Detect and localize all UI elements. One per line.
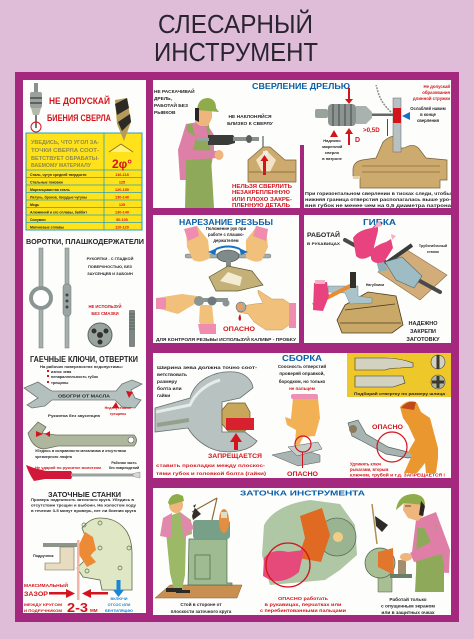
note: handles: ПОВЕРХНОСТЬЮ, БЕЗ	[88, 264, 133, 269]
note: handles	[87, 256, 134, 276]
label: pipe bender: Трубогибочный	[419, 244, 447, 248]
note: do not rock the drill	[154, 87, 195, 116]
warning: no mittens	[260, 595, 346, 613]
note: adjustable spanner check: чрезмерного люфта	[35, 455, 73, 459]
note: grinder check: в течение 3-5 минут проверь, нет ли биения круга	[31, 509, 137, 513]
note: working part: Рабочая часть	[111, 461, 137, 465]
icon: screwdriver	[26, 465, 140, 481]
note: stand aside: плоскости заточного круга	[171, 609, 232, 614]
warning: do not strike: Не ударяй по рукоятке молотком	[35, 466, 101, 470]
note: spanner defects: трещины	[51, 381, 68, 385]
note: spanner defects: На рабочих поверхностях недопустимы:	[40, 365, 123, 369]
note: do not lean: БЛИЗКО К СВЕРЛУ	[227, 121, 274, 127]
warning: secure the part	[232, 184, 292, 209]
note: adjustable spanner check: Убедись в исправности механизма и отсутствии	[35, 449, 127, 453]
note: jaw width: Ширина зева должна точно соот-	[157, 365, 257, 371]
illustration: bending in vice	[313, 272, 403, 333]
warning: no extensions: рычагами, вторым	[350, 467, 388, 472]
note: horizontal drilling: вня губок не менее чем на 0,5 диаметра патрона	[305, 203, 452, 208]
illustration: large spanner with nut	[155, 372, 257, 452]
warning: long chips	[413, 84, 450, 101]
icon: adjustable spanner	[28, 422, 136, 449]
note: do not rock the drill: РАБОТАЙ БЕЗ	[154, 101, 188, 109]
warning: secure the part: ИЛИ ПЛОХО ЗАКРЕ-	[232, 197, 292, 203]
note: jaw width	[157, 365, 257, 399]
note: jaw width: гайки	[157, 392, 170, 399]
icon: tap wrench	[63, 248, 71, 348]
heading: grinders: ЗАТОЧНЫЕ СТАНКИ	[48, 490, 121, 499]
note: horizontal drilling: нижняя граница отверстия располагалась выше уро-	[305, 197, 452, 202]
note: spanner defects	[40, 365, 123, 385]
illustration: grinder and mittened hands	[262, 500, 357, 587]
note: fix the bit: в патроне	[322, 156, 343, 161]
drill angle table: ВЕТСТВУЕТ ОБРАБАТЫ-	[31, 156, 99, 162]
note: alignment	[278, 363, 326, 391]
illustration: hands with threaded part	[156, 294, 230, 334]
note: secure the workpiece: ЗАКРЕПИ	[410, 329, 436, 335]
warning: long chips: образования	[422, 90, 450, 95]
title: СЛЕСАРНЫЙ	[158, 9, 313, 39]
drill angle table: 120-150	[115, 188, 129, 192]
callout: maximum gap: ЗАЗОР	[24, 591, 49, 598]
panel: assembly	[153, 353, 451, 478]
warning: no drill runout	[47, 95, 111, 124]
drill angle table: Сталь, чугун средней твердости	[30, 173, 86, 177]
box: screwdriver selection: Подбирай отвертку по размеру шлица	[354, 391, 446, 396]
drill angle table: 130-140	[115, 210, 129, 214]
warning: no extensions	[350, 462, 445, 478]
box: screwdriver selection	[347, 353, 451, 397]
note: jaw width: ветствовать	[157, 373, 187, 378]
note: work in mittens: В РУКАВИЦАХ	[307, 242, 341, 246]
note: grinder check	[31, 498, 137, 513]
note: gauge check: ДЛЯ КОНТРОЛЯ РЕЗЬБЫ ИСПОЛЬЗУЙ КАЛИБР - ПРОБКУ	[156, 337, 296, 342]
illustration: worker drilling	[178, 98, 264, 208]
label: jaw plates: Нагубники	[366, 283, 384, 287]
label: 0.5D clearance: >0,5D	[363, 127, 380, 134]
note: switch on ventilation	[105, 597, 133, 613]
note: work in mittens: РАБОТАЙ	[307, 231, 340, 239]
panel: tool sharpening	[153, 488, 451, 616]
drill angle table: Алюминий и его сплавы, баббит	[30, 210, 87, 214]
illustration: chuck and bit	[315, 88, 396, 145]
callout: maximum gap: И ПОДРУЧНИКОМ	[24, 608, 63, 613]
warning: no drill runout: БИЕНИЯ СВЕРЛА	[47, 113, 111, 124]
icon: die stock	[31, 248, 51, 348]
note: hand position	[206, 226, 247, 243]
drill angle table: Марганцовистая сталь	[30, 188, 70, 192]
icon: twist drill	[115, 98, 131, 141]
heading: drilling: СВЕРЛЕНИЕ ДРЕЛЬЮ	[252, 82, 350, 91]
panel: threading	[153, 215, 299, 343]
drill angle table: УВЕДИСЬ, ЧТО УГОЛ ЗА-	[31, 140, 99, 146]
warning: long chips: Не допускай	[424, 84, 450, 89]
warning: cracks: Недопустимые	[105, 406, 131, 410]
note: horizontal drilling	[305, 191, 452, 208]
illustration: lever on spanner	[348, 401, 438, 473]
note: alignment: бородком, но только	[279, 378, 326, 384]
callout: maximum gap	[24, 581, 108, 615]
note: switch on ventilation: ВЕНТИЛЯЦИЮ	[105, 609, 133, 613]
illustration: hand and aligned plates	[272, 394, 322, 468]
note: fix the bit: закрепляй	[322, 144, 343, 149]
warning: no drill runout: НЕ ДОПУСКАЙ	[49, 95, 110, 107]
drill angle table: 125	[119, 203, 125, 207]
icon: die and tap	[88, 310, 135, 347]
warning: no spacers	[156, 463, 267, 476]
panel: hand drilling	[153, 80, 452, 209]
heading: threading: НАРЕЗАНИЕ РЕЗЬБЫ	[179, 218, 273, 227]
drill angle table: 130-140	[115, 196, 129, 200]
note: do not rock the drill: НЕ РАСКАЧИВАЙ	[154, 87, 195, 95]
note: stand aside: Стой в стороне от	[180, 601, 222, 607]
callout: maximum gap: МЕЖДУ КРУГОМ	[24, 602, 63, 607]
note: working part: без повреждений	[109, 466, 139, 470]
note: do not lean: НЕ НАКЛОНЯЙСЯ	[228, 112, 272, 120]
warning: no mittens: ОПАСНО работать	[278, 595, 328, 601]
warning: danger: ОПАСНО	[223, 326, 255, 333]
note: ease pressure: Ослабляй нажим	[410, 106, 446, 111]
note: hand position: держателем	[213, 238, 239, 243]
note: handles: ЗАУСЕНЦЕВ И ЗАБОИН	[87, 271, 133, 276]
illustration: bench vice	[248, 147, 296, 182]
heading: bending: ГИБКА	[363, 218, 396, 227]
note: hand position: работе с плашко-	[208, 232, 245, 237]
label: pipe bender: станок	[427, 250, 439, 254]
warning: long chips: длинной стружки	[413, 96, 450, 101]
drill angle table: Силумин	[30, 218, 46, 222]
heading: tap wrenches: ВОРОТКИ, ПЛАШКОДЕРЖАТЕЛИ	[26, 239, 144, 246]
note: alignment: проверяй оправкой,	[279, 370, 325, 376]
warning: secure the part: НЕЗАКРЕПЛЕННУЮ	[232, 190, 290, 196]
note: do not rock the drill: ДРЕЛЬ,	[154, 96, 173, 102]
drill angle table: 90-100	[116, 218, 128, 222]
note: secure the workpiece: НАДЕЖНО	[409, 321, 438, 327]
warning: cracks	[105, 406, 131, 416]
note: ease pressure: сверления	[417, 118, 440, 123]
label: tool rest: Подручник	[33, 554, 54, 558]
note: adjustable spanner check	[35, 449, 127, 459]
drill angle table: Латунь, бронза, твердые чугуны	[30, 196, 87, 200]
title	[154, 9, 318, 67]
warning: no extensions: ключом, трубой и т.д. ЗАПРЕЩАЕТСЯ !	[350, 472, 445, 478]
warning: secure the part: ПЛЕННУЮ ДЕТАЛЬ	[232, 203, 290, 209]
illustration: hands on die stock	[184, 226, 271, 291]
heading: assembly: СБОРКА	[282, 354, 322, 363]
note: alignment: не пальцем	[289, 386, 316, 391]
drill angle table: Стальные поковки	[30, 180, 63, 184]
heading: spanners and screwdrivers: ГАЕЧНЫЕ КЛЮЧИ, ОТВЕРТКИ	[30, 355, 138, 364]
drill angle table: 125	[119, 180, 125, 184]
warning: no spacers: ставить прокладки между плоскос-	[156, 463, 266, 468]
diagram: grinding wheel with guard	[43, 518, 132, 600]
note: working part	[109, 461, 139, 470]
warning: danger: ОПАСНО	[287, 471, 318, 478]
warning: no spacers: тями губок и головкой болта (гайки)	[156, 470, 267, 476]
warning: lubricate	[88, 304, 122, 316]
title: ИНСТРУМЕНТ	[154, 37, 318, 67]
panel: bending	[304, 215, 451, 343]
warning: no mittens: с перебинтованными пальцами	[260, 607, 346, 613]
warning: no extensions: Удлинять ключ	[350, 462, 382, 466]
note: stand aside	[171, 601, 232, 614]
drill angle table: 2φ°	[112, 157, 132, 171]
note: secure the workpiece: ЗАГОТОВКУ	[406, 337, 440, 343]
note: do not lean	[227, 112, 274, 127]
icon: open-end spanner: ОБОГРИ ОТ МАСЛА	[58, 394, 111, 398]
note: work in mittens	[307, 231, 341, 246]
drill angle table: 110-120	[115, 226, 129, 230]
note: grinder check: отсутствии трещин и выбоин. На холостом ходу	[31, 504, 137, 508]
note: fix the bit: Надежно	[323, 138, 341, 143]
illustration: worker with lowered screen	[365, 494, 450, 592]
illustration: dangerous finger near die	[236, 290, 296, 330]
drill angle table: Медь	[30, 203, 39, 207]
note: secure the workpiece	[406, 321, 440, 343]
note: spanner defects: непараллельность губок	[51, 375, 98, 379]
drill angle table: 116-118	[115, 173, 129, 177]
drill angle table: Магниевые сплавы	[30, 226, 64, 230]
drill angle table: ТОЧКИ СВЕРЛА СООТ-	[31, 148, 99, 154]
warning: lubricate: БЕЗ СМАЗКИ	[91, 311, 119, 316]
icon: drill chuck with runout circle	[30, 83, 42, 132]
note: spanner handle: Рукоятка без заусенцев	[48, 414, 101, 418]
note: ease pressure: в конце	[420, 112, 437, 117]
note: jaw width: болта или	[157, 385, 182, 392]
drill angle table	[26, 133, 142, 230]
note: work with screen or goggles: или в защитных очках	[381, 611, 435, 616]
callout: maximum gap: ММ	[90, 608, 98, 613]
panel: left column	[23, 80, 146, 615]
note: horizontal drilling: При горизонтальном сверлении в тисках следи, чтобы	[305, 191, 451, 196]
illustration: pipe bender	[345, 220, 447, 300]
callout: maximum gap: МАКСИМАЛЬНЫЙ	[24, 581, 69, 589]
icon: ventilation arrow	[113, 580, 124, 597]
warning: lubricate: НЕ ИСПОЛЬЗУЙ	[88, 304, 122, 309]
icon: open-end spanner	[24, 380, 142, 408]
note: ease pressure	[410, 106, 446, 123]
warning: danger: ОПАСНО	[372, 424, 403, 431]
warning: secure the part: НЕЛЬЗЯ СВЕРЛИТЬ	[232, 184, 292, 190]
note: fix the bit: сверло	[325, 150, 340, 155]
illustration: workpiece in vice	[353, 85, 447, 188]
warning: no mittens: в рукавицах, перчатках или	[264, 602, 342, 607]
note: work with screen or goggles: с опущенным экраном	[381, 604, 435, 610]
callout: maximum gap: 2-3	[67, 600, 88, 615]
note: spanner defects: износ зева	[51, 370, 72, 374]
note: work with screen or goggles: Работай только	[389, 596, 427, 603]
note: alignment: Соосность отверстий	[278, 363, 326, 369]
note: do not rock the drill: РЫВКОВ	[154, 110, 176, 116]
heading: sharpening: ЗАТОЧКА ИНСТРУМЕНТА	[240, 490, 365, 498]
note: switch on ventilation: ВКЛЮЧИ	[110, 597, 128, 601]
note: switch on ventilation: ОТСОС ИЛИ	[108, 603, 131, 607]
note: work with screen or goggles	[381, 596, 435, 616]
warning: forbidden: ЗАПРЕЩАЕТСЯ	[208, 453, 263, 460]
note: jaw width: размеру	[157, 380, 177, 385]
illustration: worker at grinder from behind	[155, 494, 242, 598]
note: hand position: Положение рук при	[206, 226, 247, 231]
note: handles: РУКОЯТКИ - С ГЛАДКОЙ	[87, 256, 134, 261]
label: pipe bender	[419, 244, 447, 254]
note: grinder check: Проверь надежность заточного круга. Убедись в	[31, 498, 135, 502]
warning: cracks: трещины	[110, 412, 126, 416]
note: fix the bit	[322, 138, 343, 161]
drill angle table: ВАЕМОМУ МАТЕРИАЛУ	[31, 163, 92, 169]
illustration: chuck and bit: D	[355, 137, 360, 144]
